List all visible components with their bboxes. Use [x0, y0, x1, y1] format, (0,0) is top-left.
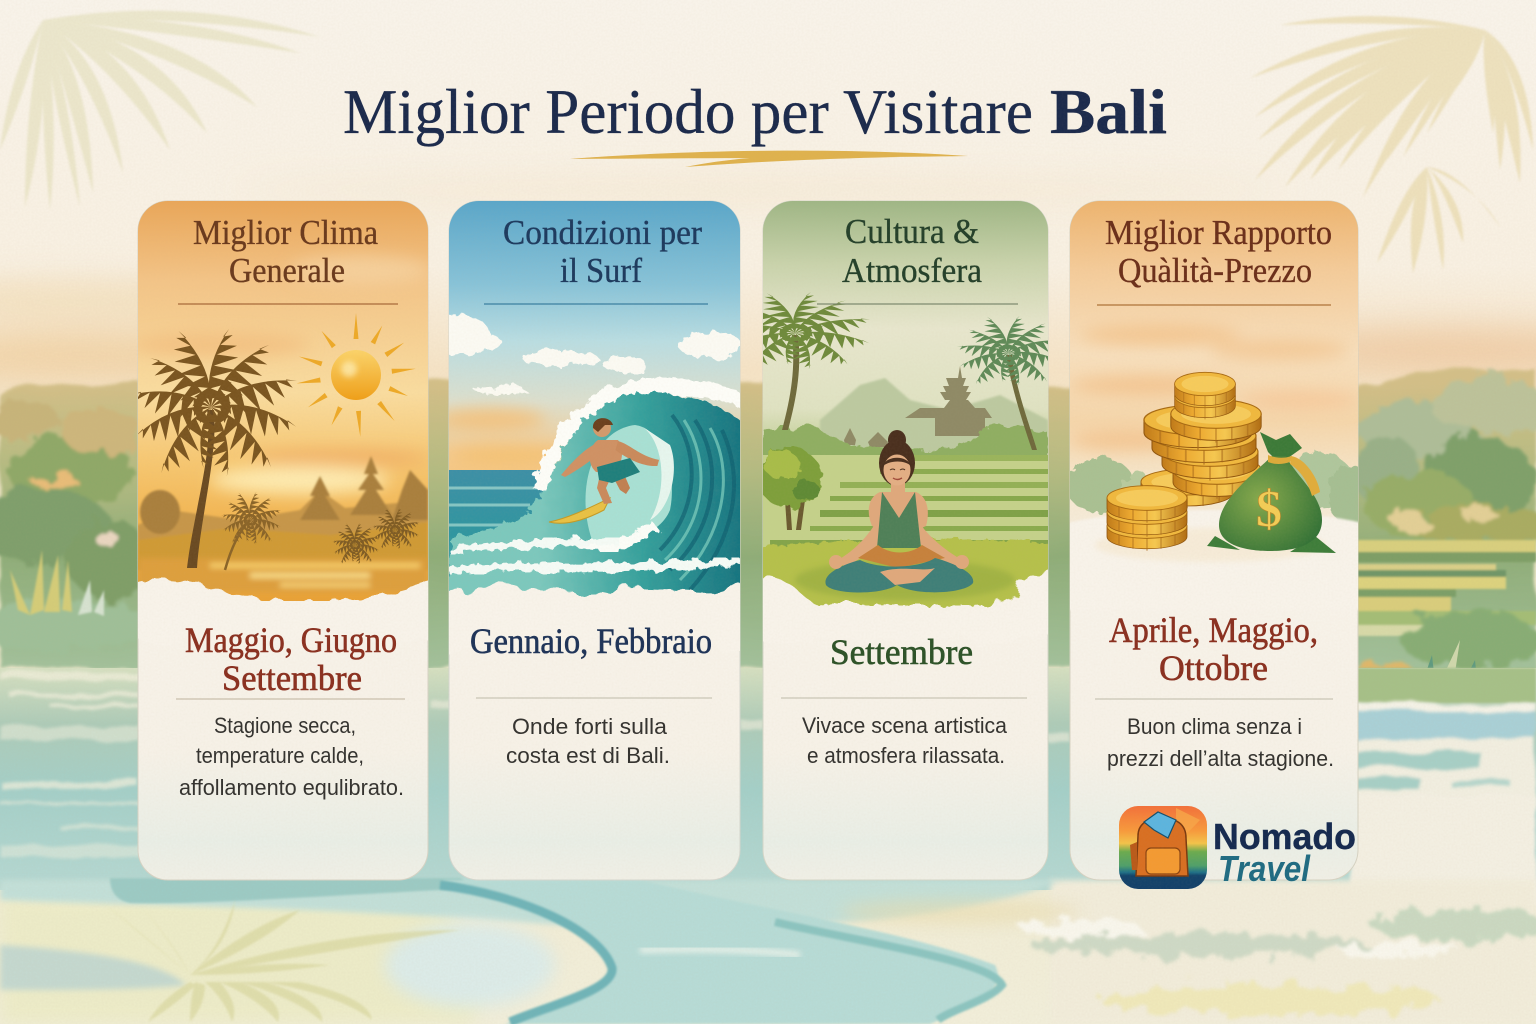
- trees left: [0, 402, 155, 651]
- heading: Generale: [229, 251, 345, 290]
- heading: Atmosfera: [842, 251, 982, 290]
- months: Settembre: [830, 632, 973, 672]
- description: Onde forti sulla: [512, 714, 668, 739]
- title: Miglior Periodo per Visitare: [343, 76, 1033, 147]
- illustration: sky, trees and sand: [1060, 201, 1372, 610]
- icon: money bag: $: [1256, 481, 1282, 538]
- months: Aprile, Maggio,: [1109, 610, 1318, 650]
- logo: nomado travel: Nomado: [1213, 816, 1356, 857]
- heading: Quàlità-Prezzo: [1118, 251, 1312, 290]
- logo: nomado travel: Travel: [1218, 848, 1311, 889]
- heading: [842, 212, 982, 290]
- wave: [449, 385, 745, 600]
- icon: money bag: [1207, 432, 1336, 553]
- clouds: [430, 315, 742, 394]
- illustration: surfer in a wave: [430, 201, 750, 650]
- description: prezzi dell’alta stagione.: [1107, 746, 1334, 771]
- meditating woman: [825, 430, 973, 593]
- icon: coin stacks: [1107, 372, 1261, 551]
- title: Bali: [1050, 76, 1167, 147]
- icon: sun: [296, 313, 416, 437]
- icon: palm tree: [129, 327, 421, 570]
- water stripes: [0, 668, 1536, 890]
- months: [1109, 610, 1318, 688]
- panel: miglior clima generale: [129, 201, 440, 880]
- icon: backpack app tile: [1119, 806, 1207, 889]
- months: [185, 620, 397, 698]
- grass blades left: [10, 550, 104, 616]
- heading: [193, 213, 378, 290]
- months: Gennaio, Febbraio: [470, 621, 712, 661]
- shrub: [758, 448, 822, 530]
- panel: cultura e atmosfera: [762, 200, 1048, 880]
- sea: [449, 470, 544, 591]
- illustration: palm and sun at sunset: [129, 201, 440, 640]
- rice terraces right: [1356, 540, 1536, 636]
- panel: condizioni per il surf: [430, 201, 750, 880]
- logo: nomado travel: [1119, 806, 1356, 889]
- heading: [503, 213, 702, 290]
- torn white edge: [755, 568, 1055, 640]
- rice terraces: [763, 455, 1048, 548]
- heading: Condizioni per: [503, 213, 702, 252]
- months: Ottobre: [1159, 648, 1268, 688]
- bushes and agave right: [1354, 612, 1536, 704]
- forest band: [763, 423, 1048, 455]
- months: Maggio, Giugno: [185, 620, 397, 660]
- heading: Miglior Rapporto: [1105, 213, 1332, 252]
- description: e atmosfera rilassata.: [807, 743, 1005, 768]
- heading: Miglior Clima: [193, 213, 378, 252]
- mountains: [820, 378, 1048, 455]
- wave foam: [540, 385, 740, 490]
- description: [179, 713, 404, 800]
- background palm reflection: [100, 900, 460, 1022]
- palms: [763, 292, 1048, 450]
- sunlit water: [138, 558, 428, 592]
- description: Buon clima senza i: [1127, 714, 1302, 739]
- panel: miglior rapporto qualita-prezzo: [1060, 201, 1372, 880]
- heading: il Surf: [560, 251, 642, 290]
- heading: Cultura &: [845, 212, 979, 251]
- white sand cloud: [1060, 510, 1370, 610]
- distant forest and temple silhouette: [138, 456, 428, 570]
- background palm top right: [1250, 16, 1533, 273]
- title brush underline: [570, 151, 968, 167]
- torn foam edge: [440, 585, 750, 650]
- description: [1107, 714, 1334, 771]
- description: affollamento equlibrato.: [179, 775, 404, 800]
- description: [506, 714, 670, 768]
- surfer: [549, 418, 659, 523]
- temple: [844, 366, 992, 447]
- distant trees: [1066, 452, 1372, 525]
- description: temperature calde,: [196, 743, 364, 768]
- background forest band: [0, 370, 1536, 705]
- torn white edge: [130, 575, 440, 640]
- heading: [1105, 213, 1332, 290]
- grass: [755, 538, 1055, 607]
- trees right: [1351, 377, 1536, 545]
- description: Stagione secca,: [214, 713, 356, 738]
- months: Settembre: [222, 658, 362, 698]
- background palm top left: [0, 11, 320, 210]
- ground below cards: [0, 878, 1536, 1024]
- illustration: meditation in rice terraces: [763, 201, 1048, 642]
- description: costa est di Bali.: [506, 743, 670, 768]
- description: Vivace scena artistica: [802, 713, 1008, 738]
- right shore water: [1350, 703, 1536, 905]
- description: [802, 713, 1008, 768]
